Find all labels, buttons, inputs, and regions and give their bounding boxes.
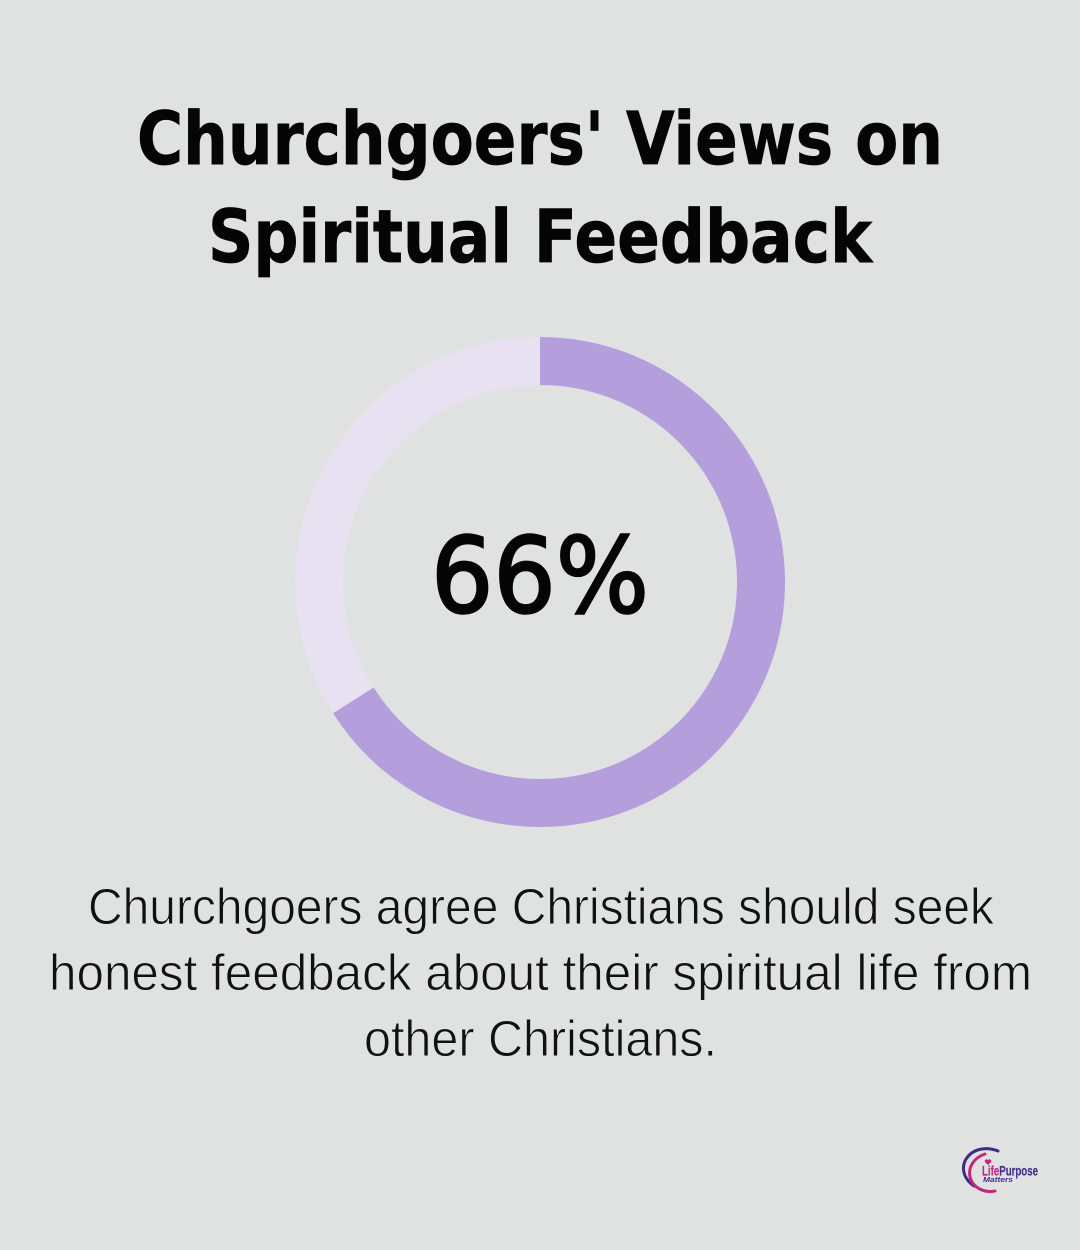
logo arcs bbox=[963, 1149, 998, 1191]
description text: other Christians. bbox=[364, 1010, 717, 1067]
logo: Life Purpose Matters: Matters bbox=[983, 1175, 1013, 1184]
donut value: 66% bbox=[431, 515, 649, 637]
description text bbox=[49, 878, 1032, 1067]
donut chart: 66% bbox=[319, 361, 761, 803]
logo wordmark: LifePurpose bbox=[982, 1164, 1038, 1178]
description text: Churchgoers agree Christians should seek bbox=[88, 878, 994, 935]
title: Churchgoers' Views on bbox=[137, 97, 943, 182]
logo: Life Purpose Matters bbox=[963, 1149, 1038, 1191]
logo heart bbox=[985, 1159, 991, 1165]
title: Spiritual Feedback bbox=[208, 195, 873, 280]
description text: honest feedback about their spiritual life from bbox=[49, 944, 1032, 1001]
title bbox=[137, 97, 943, 280]
